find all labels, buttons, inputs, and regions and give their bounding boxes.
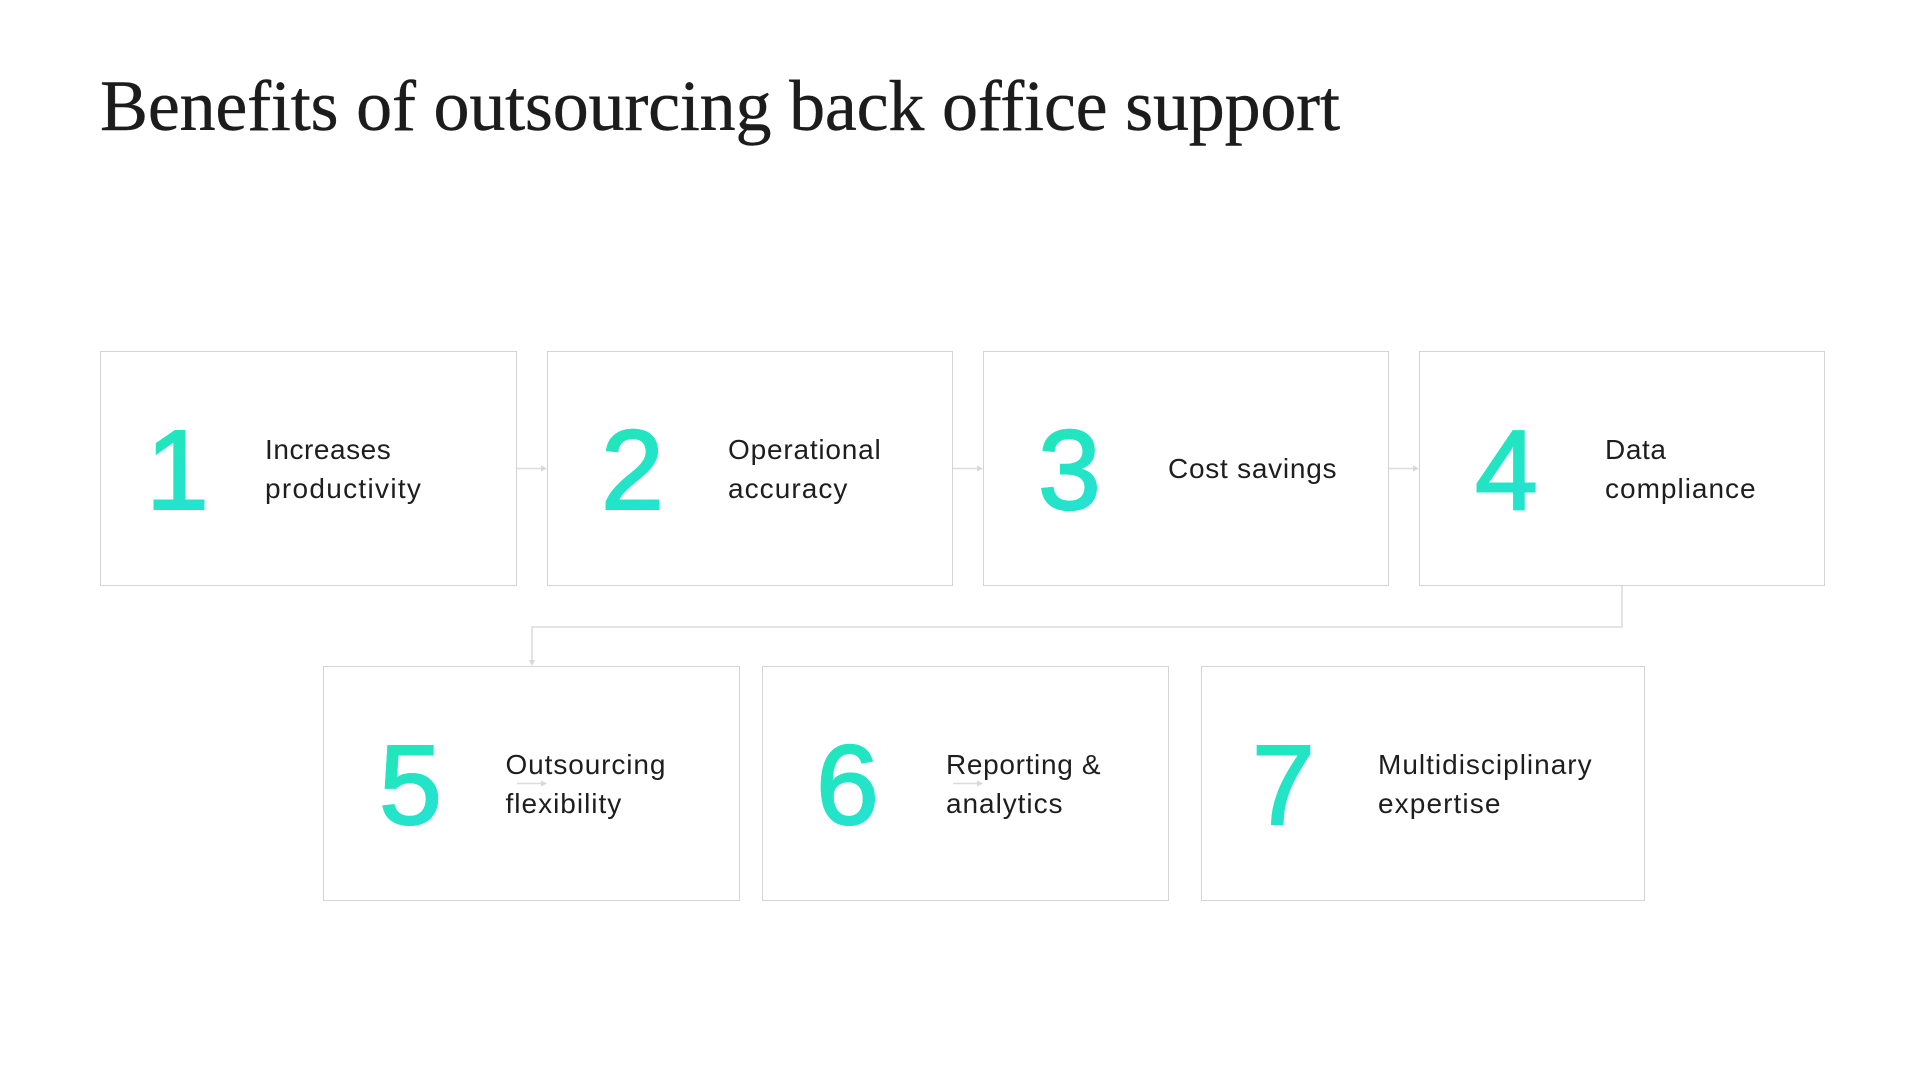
label 7: Multidisciplinary [1378, 749, 1593, 780]
number 3: 3 [1038, 407, 1101, 533]
card 4 [1419, 351, 1825, 586]
card 3 [983, 351, 1389, 586]
number 7: 7 [1252, 722, 1315, 848]
arrow 4 to 5 [529, 586, 1622, 666]
label 1: productivity [265, 473, 422, 504]
label 1: Increases [265, 434, 391, 465]
label 6 [946, 749, 1101, 819]
title: Benefits of outsourcing back office support [100, 66, 1340, 146]
arrow 5 to 6 [517, 780, 547, 786]
label 4: Data [1605, 434, 1667, 465]
arrow 3 to 4 [1389, 466, 1419, 472]
arrow 1 to 2 [517, 466, 547, 472]
label 5 [506, 749, 666, 819]
number 2: 2 [601, 407, 664, 533]
card 5 [323, 666, 740, 901]
label 7 [1378, 749, 1593, 819]
arrow 6 to 7 [953, 780, 983, 786]
label 7: expertise [1378, 788, 1502, 819]
card 2 [547, 351, 953, 586]
card 6 [762, 666, 1169, 901]
label 6: analytics [946, 788, 1064, 819]
label 5: flexibility [506, 788, 622, 819]
label 2 [728, 434, 882, 504]
label 1 [265, 434, 422, 504]
number 5: 5 [379, 722, 442, 848]
label 5: Outsourcing [506, 749, 666, 780]
label 2: accuracy [728, 473, 848, 504]
label 3: Cost savings [1168, 453, 1337, 484]
number 6: 6 [816, 722, 879, 848]
number 4: 4 [1475, 407, 1538, 533]
label 6: Reporting & [946, 749, 1101, 780]
label 4 [1605, 434, 1757, 504]
label 4: compliance [1605, 473, 1757, 504]
label 2: Operational [728, 434, 882, 465]
card 1 [100, 351, 517, 586]
arrow 2 to 3 [953, 466, 983, 472]
number 1: 1 [146, 407, 209, 533]
card 7 [1201, 666, 1645, 901]
